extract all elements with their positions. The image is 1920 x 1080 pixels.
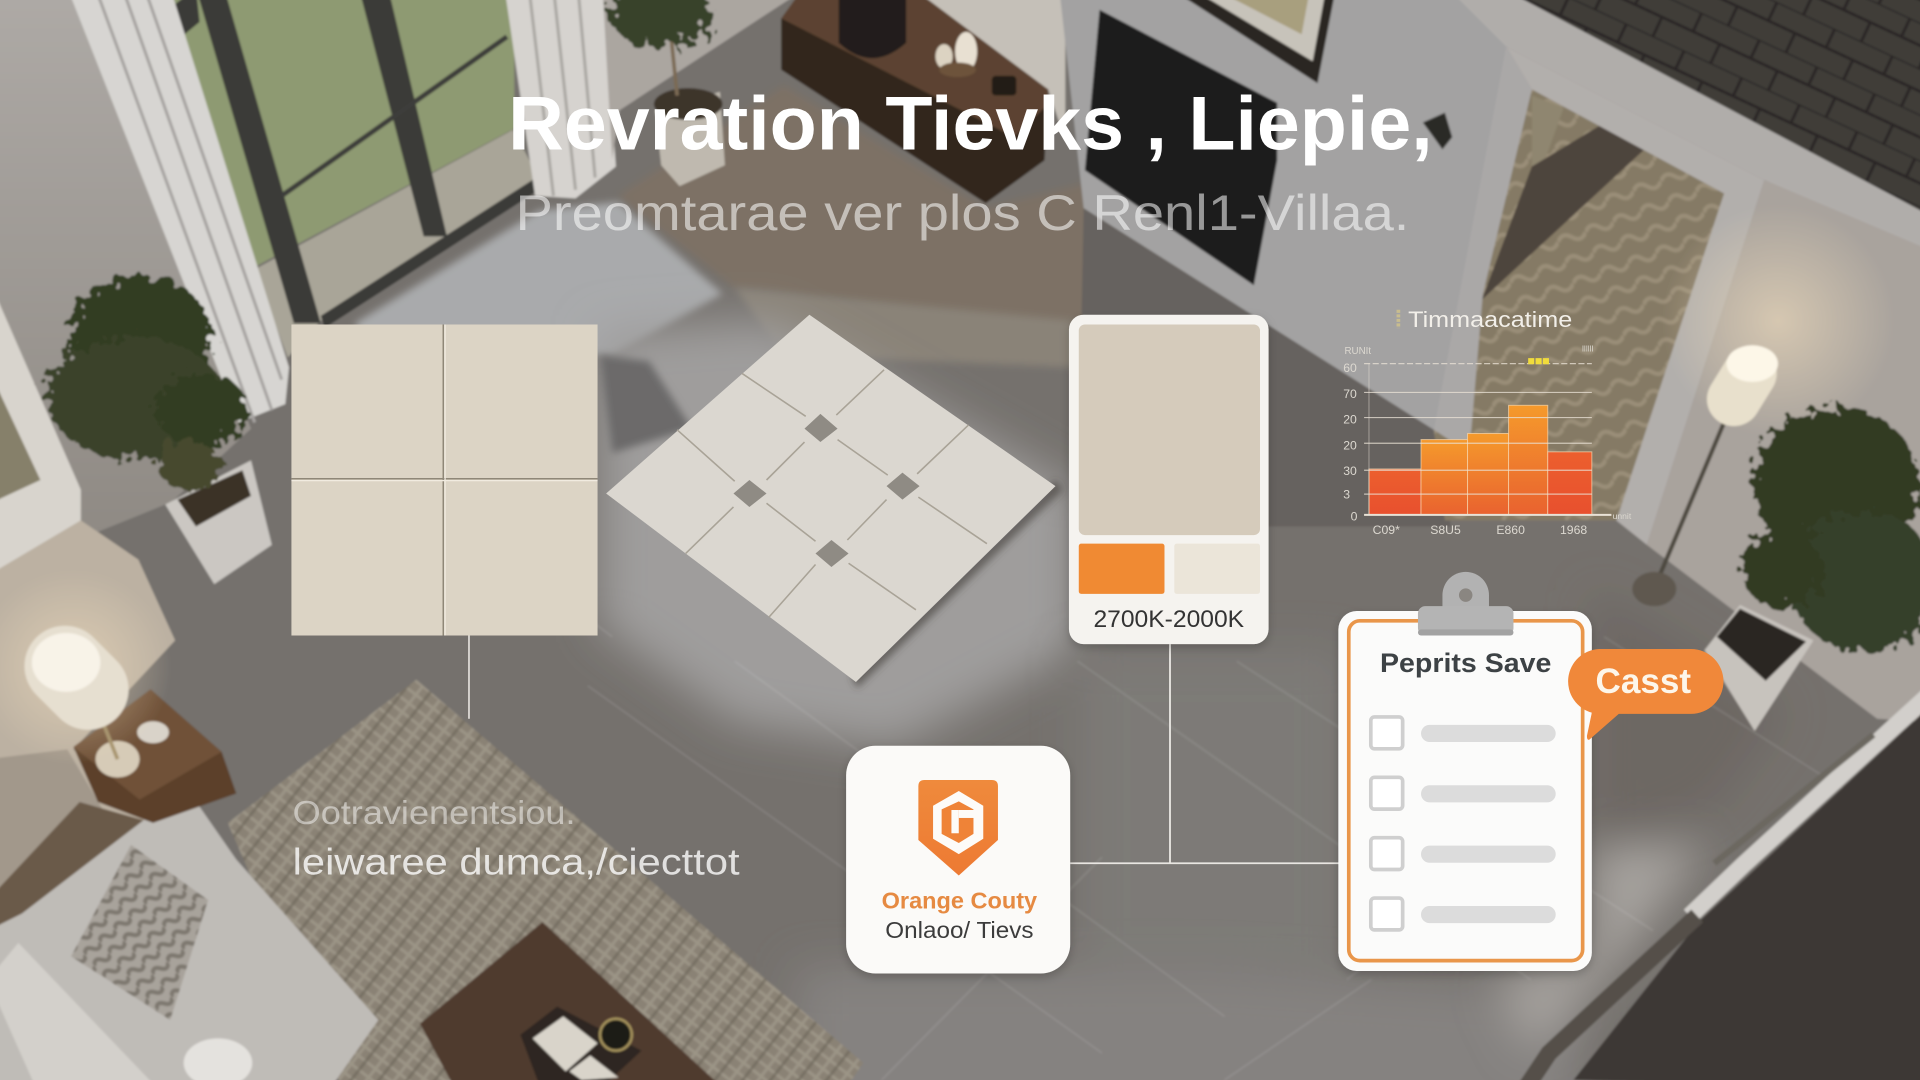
axis labels: 30 [1343, 464, 1357, 478]
logo name: Orange Couty [882, 888, 1037, 914]
axis labels: 0 [1351, 509, 1358, 523]
tile joints [291, 324, 598, 636]
main swatch [1079, 324, 1260, 535]
coffee table [420, 922, 725, 1080]
callout: orange speech bubble [1568, 649, 1723, 740]
axis labels: 3 [1343, 487, 1350, 501]
back wall left of console [602, 0, 807, 159]
axis labels [1343, 343, 1632, 537]
console top [781, 0, 1048, 137]
doorway with carpeted room [1434, 89, 1724, 520]
floor shading: bottom centre [796, 967, 1580, 1080]
hall wall [1059, 0, 1532, 453]
title: Revration Tievks , Liepie, [508, 81, 1433, 166]
tray and cards [520, 1007, 642, 1080]
clip [1418, 572, 1513, 636]
colour temperature label: 2700K-2000K [1093, 606, 1244, 633]
floor shading: sunlit around samples [599, 318, 1078, 747]
inset dots [804, 414, 838, 442]
cream swatch [1174, 544, 1260, 594]
axis labels: unnit [1613, 511, 1632, 521]
right plant and pot [1704, 605, 1813, 731]
black vase [839, 0, 906, 58]
wall behind console [845, 0, 1065, 141]
text block: tile caption: Ootravienentsiou. [293, 795, 576, 832]
candles [955, 32, 977, 71]
sample shadow [851, 480, 1063, 688]
axis labels: 60 [1343, 361, 1357, 375]
connector: tile panel to caption [468, 636, 470, 719]
checklist item 1 [1371, 717, 1556, 749]
text block: tile caption [293, 795, 740, 882]
left curtain [67, 0, 289, 422]
panel: colour swatch card [1069, 315, 1269, 644]
checklist heading: Peprits Save [1380, 648, 1551, 678]
muntin [282, 37, 507, 196]
panel: diamond-laid tile sample [606, 315, 1063, 688]
wood floor by sofa [0, 802, 153, 943]
yellow marker [1528, 359, 1550, 364]
fireplace [1085, 10, 1277, 285]
axis labels: 20 [1343, 413, 1357, 427]
potted tree by console [655, 92, 725, 186]
lamp glow and shade [0, 569, 171, 765]
joints [677, 370, 987, 617]
window frame [173, 0, 545, 328]
left wall [0, 0, 251, 539]
floor lamp [1656, 422, 1724, 585]
gridlines and axes [1364, 364, 1611, 515]
right wall [1647, 180, 1920, 722]
orange inner border [1349, 621, 1583, 961]
panel: clipboard checklist [1338, 572, 1592, 971]
floor shading: right dark band [1592, 588, 1788, 857]
roof shingles [1501, 0, 1920, 217]
chart: bar chart with title [1343, 307, 1632, 537]
axis labels: 1968 [1560, 523, 1587, 537]
chart title: Timmaacatime [1408, 307, 1572, 332]
left plant and pot [165, 460, 272, 584]
panel: square limestone tile sample [291, 324, 598, 636]
checklist item 3 [1371, 838, 1556, 870]
checklist item 4 [1371, 898, 1556, 930]
right curtain [504, 0, 616, 198]
logo subtitle: Onlaoo/ Tievs [885, 917, 1033, 943]
axis labels: E860 [1496, 523, 1525, 537]
floor tile lines [416, 490, 1873, 1080]
pillow [71, 845, 208, 1020]
back-right dark floor under hall wall [1078, 208, 1451, 527]
console front [781, 18, 1048, 203]
wall sconce [1423, 113, 1452, 149]
orange swatch [1079, 544, 1164, 594]
floor shading: sunlit under window [355, 202, 722, 355]
sofa cushion [184, 1038, 252, 1080]
framed picture over fireplace [1169, 0, 1336, 83]
lamp side table [73, 689, 236, 823]
text block: tile caption: leiwaree dumca,/ciecttot [293, 841, 740, 882]
door frame [1506, 47, 1764, 545]
axis labels: S8U5 [1430, 523, 1461, 537]
tile surface [606, 315, 1056, 682]
bottom-right roof [1573, 704, 1920, 1080]
chart title icon [1397, 310, 1400, 328]
garden view [170, 0, 514, 267]
rug [228, 680, 863, 1080]
bars [1369, 405, 1592, 515]
axis labels: RUNIt [1344, 346, 1371, 357]
subtitle: Preomtarae ver plos C Renl1-Villaa. [516, 185, 1409, 241]
axis labels: 20 [1343, 438, 1357, 452]
floor shading: dark stripe [600, 355, 692, 453]
floor shading: warm band below console [618, 86, 1261, 331]
axis labels: C09* [1373, 523, 1400, 537]
icon: shield logo [918, 780, 998, 876]
floor shading: top of tile [735, 288, 1078, 367]
floor shading: right middle [1078, 649, 1347, 980]
sofa [0, 803, 378, 1080]
callout: orange speech bubble: Casst [1596, 661, 1691, 701]
roof trim [1447, 0, 1920, 251]
panel: logo card [846, 746, 1070, 973]
lit lower-left wall [0, 520, 175, 943]
checklist item 2 [1371, 777, 1556, 809]
axis labels: llllll [1582, 343, 1594, 353]
floor shading: right light band [1494, 845, 1708, 1053]
framed picture [0, 277, 81, 576]
connector: swatch card to logo and clipboard [1070, 644, 1340, 863]
axis labels: 70 [1343, 387, 1357, 401]
patio strip [255, 130, 540, 358]
